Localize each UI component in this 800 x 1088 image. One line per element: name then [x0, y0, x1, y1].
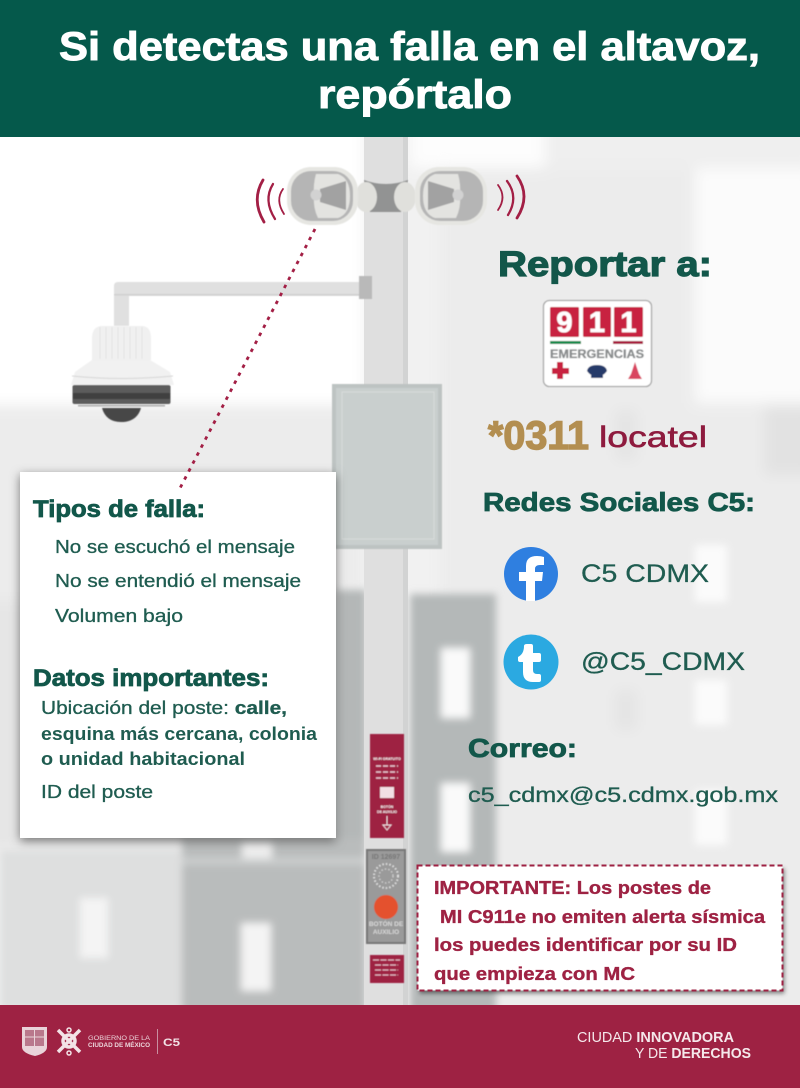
- icon: sound waves right: [498, 176, 524, 218]
- icon: sound waves left: [257, 180, 284, 222]
- text: facebook account: C5 CDMX: [581, 560, 709, 588]
- callout: importante: MI C911e no emiten alerta sísmica: [440, 907, 766, 927]
- heading: correo: Correo:: [468, 733, 577, 763]
- title: repórtalo: [318, 73, 512, 117]
- callout: importante: IMPORTANTE: Los postes de: [434, 878, 711, 898]
- text: government name: CIUDAD DE MÉXICO: [88, 1040, 150, 1049]
- pole: [364, 137, 408, 1007]
- panel: fault types and key data: [20, 472, 336, 838]
- speaker bracket: [355, 180, 416, 212]
- heading: reportar a: Reportar a:: [498, 245, 712, 284]
- icon: security camera: [71, 326, 174, 422]
- logo: 911 emergencias: 9: [556, 307, 573, 339]
- heading: redes sociales: Redes Sociales C5:: [483, 487, 755, 517]
- text: government name: [88, 1035, 151, 1049]
- text: social account: @C5_CDMX: [581, 648, 745, 676]
- list: fault types: [55, 537, 301, 626]
- list: key data: ID del poste: [41, 782, 153, 802]
- logo: *0311: *0311: [488, 414, 589, 458]
- logo: 911 emergencias: 1: [620, 307, 637, 339]
- pole button panel: AUXILIO: [373, 929, 399, 936]
- logo: 911 emergencias: EMERGENCIAS: [550, 347, 644, 361]
- footer band: [0, 1005, 800, 1088]
- pole sticker: wifi: DE AUXILIO: [377, 810, 397, 814]
- list: key data: Ubicación del poste: calle,: [41, 698, 287, 718]
- dotted leader line: [178, 229, 315, 492]
- pole sticker: wifi: BOTÓN: [381, 804, 394, 809]
- text: government name: GOBIERNO DE LA: [88, 1035, 151, 1042]
- title: [59, 25, 760, 117]
- list: key data: [41, 698, 318, 802]
- list: fault types: No se escuchó el mensaje: [55, 537, 295, 557]
- callout: importante: los puedes identificar por su ID: [434, 935, 737, 955]
- icon: right speaker: [415, 167, 487, 225]
- list: key data: o unidad habitacional: [41, 749, 245, 769]
- pole sticker: wifi: WI-FI GRATUITO: [373, 757, 401, 761]
- logo: 911 emergencias: 1: [589, 307, 605, 339]
- icon: facebook: [504, 547, 558, 601]
- list: key data: esquina más cercana, colonia: [41, 724, 318, 744]
- callout: importante: [418, 866, 782, 990]
- text: C5: C5: [163, 1037, 180, 1049]
- camera arm: [114, 276, 372, 326]
- list: fault types: No se entendió el mensaje: [55, 571, 301, 591]
- icon: left speaker: [287, 167, 358, 225]
- pole button panel: BOTÓN DE: [369, 919, 404, 928]
- logo: locatel: locatel: [599, 421, 707, 454]
- pole sticker: wifi: [370, 734, 404, 838]
- text: slogan: [577, 1029, 751, 1062]
- text: slogan: CIUDAD INNOVADORA: [577, 1029, 734, 1046]
- box on pole: [332, 384, 442, 549]
- title: Si detectas una falla en el altavoz,: [59, 25, 760, 69]
- text: email: c5_cdmx@c5.cdmx.gob.mx: [468, 784, 779, 807]
- pole sticker: instructions: [370, 955, 404, 983]
- text: slogan: Y DE DERECHOS: [635, 1045, 751, 1062]
- list: fault types: Volumen bajo: [55, 606, 183, 626]
- logo: shield: [22, 1027, 47, 1056]
- heading: datos importantes: Datos importantes:: [33, 665, 269, 692]
- callout: importante: que empieza con MC: [434, 964, 635, 984]
- logo: 911 emergencias: [544, 300, 652, 386]
- heading: tipos de falla: Tipos de falla:: [33, 496, 205, 523]
- header band: [0, 0, 800, 137]
- pole button panel: [367, 850, 405, 943]
- pole button panel: ID 12697: [372, 854, 400, 861]
- icon: social t: [504, 634, 558, 690]
- logo: city knot: [58, 1028, 80, 1055]
